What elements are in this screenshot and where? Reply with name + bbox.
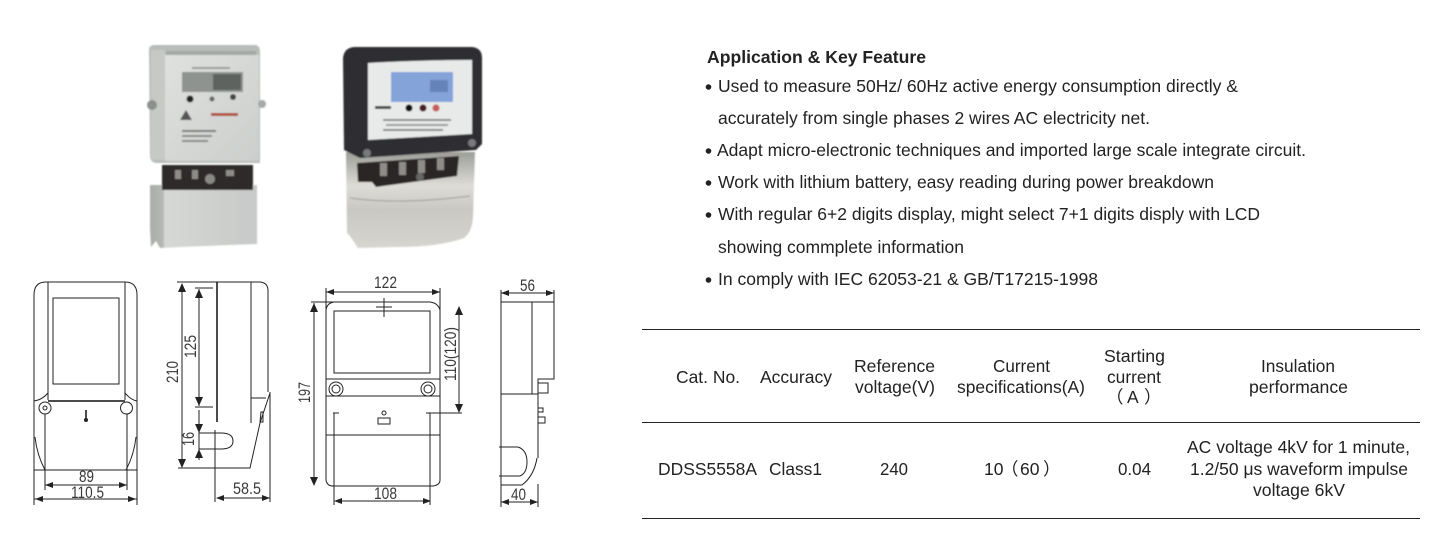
table header row: current xyxy=(1107,367,1161,387)
table data row: 1.2/50 μs waveform impulse xyxy=(1190,459,1408,479)
table data row: Class1 xyxy=(769,459,822,479)
table header row: performance xyxy=(1249,377,1348,397)
drawing: side view, 210 / 125 / 16 / 58.5: 58.5 xyxy=(233,479,261,498)
product photo: grey meter xyxy=(147,45,266,248)
table header row: Reference xyxy=(854,356,935,376)
feature list: Adapt micro-electronic techniques and imported large scale integrate circuit. xyxy=(717,140,1306,160)
feature list xyxy=(706,76,1306,289)
table header row: Starting xyxy=(1104,346,1165,366)
drawing: front view, 89 x 110.5 xyxy=(34,282,137,505)
table data row: （ xyxy=(1001,459,1018,479)
drawing: installation front view, 122 / 197 / 110(120) / 108: 110(120) xyxy=(441,327,460,381)
table header row: A xyxy=(1127,387,1139,407)
table header row: Current xyxy=(993,356,1050,376)
feature list: accurately from single phases 2 wires AC electricity net. xyxy=(718,108,1150,128)
table data row xyxy=(658,437,1410,500)
table header row: specifications(A) xyxy=(957,377,1085,397)
drawing: front view, 89 x 110.5: 110.5 xyxy=(71,483,104,502)
feature list: Used to measure 50Hz/ 60Hz active energy consumption directly & xyxy=(718,76,1238,96)
table data row: AC voltage 4kV for 1 minute, xyxy=(1187,437,1410,457)
drawing: installation side view, 56 / 40 xyxy=(499,276,554,507)
drawing: side view, 210 / 125 / 16 / 58.5 xyxy=(163,282,270,502)
table data row: 240 xyxy=(880,459,908,479)
table header row: （ xyxy=(1106,387,1124,407)
drawing: front view, 89 x 110.5: 89 xyxy=(79,467,94,486)
specification table xyxy=(642,330,1420,518)
heading: application and key feature: Application & Key Feature xyxy=(707,47,926,67)
table header row: voltage(V) xyxy=(855,377,935,397)
table header row: ） xyxy=(1144,387,1162,407)
drawing: side view, 210 / 125 / 16 / 58.5: 16 xyxy=(179,432,198,446)
drawing: installation side view, 56 / 40: 56 xyxy=(520,276,535,295)
product photo: black meter with blue LCD xyxy=(343,47,482,248)
drawing: installation front view, 122 / 197 / 110(120) / 108: 122 xyxy=(374,273,397,292)
table data row: ） xyxy=(1043,459,1060,479)
drawing: installation front view, 122 / 197 / 110(120) / 108: 197 xyxy=(295,382,314,403)
feature list: With regular 6+2 digits display, might select 7+1 digits disply with LCD xyxy=(718,204,1260,224)
table data row: 60 xyxy=(1020,459,1040,479)
feature list: Work with lithium battery, easy reading during power breakdown xyxy=(718,172,1214,192)
drawing: side view, 210 / 125 / 16 / 58.5: 125 xyxy=(181,335,200,358)
feature list: showing commplete information xyxy=(718,237,964,257)
drawing: installation front view, 122 / 197 / 110(120) / 108 xyxy=(295,273,463,505)
table header row: Insulation xyxy=(1261,356,1335,376)
table data row: 10 xyxy=(984,459,1004,479)
table header row xyxy=(676,346,1348,407)
table header row: Cat. No. xyxy=(676,367,740,387)
table data row: DDSS5558A xyxy=(658,459,757,479)
drawing: side view, 210 / 125 / 16 / 58.5: 210 xyxy=(163,361,182,383)
drawing: installation side view, 56 / 40: 40 xyxy=(511,485,526,504)
table data row: 0.04 xyxy=(1118,459,1151,479)
drawing: installation front view, 122 / 197 / 110(120) / 108: 108 xyxy=(374,484,397,503)
table data row: voltage 6kV xyxy=(1253,480,1345,500)
feature list: In comply with IEC 62053-21 & GB/T17215-1998 xyxy=(718,269,1098,289)
table header row: Accuracy xyxy=(760,367,832,387)
